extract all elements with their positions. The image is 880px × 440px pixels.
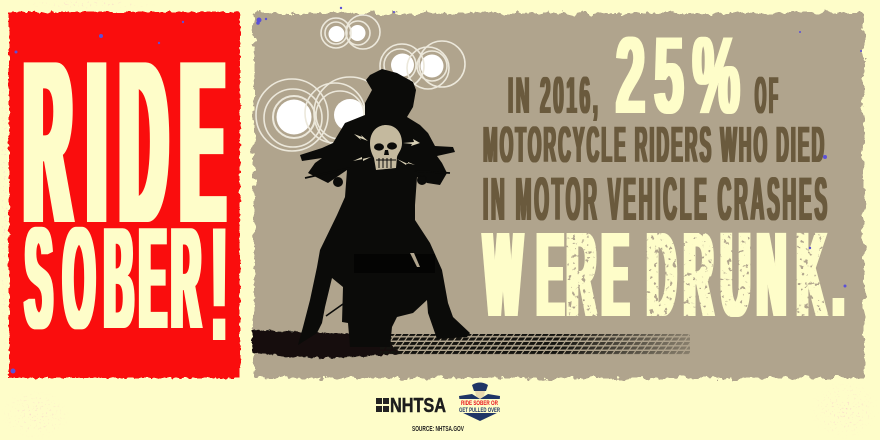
- panel: tan photo background: [254, 13, 864, 378]
- badge text line 2: GET PULLED OVER: [459, 407, 500, 414]
- shield: [459, 394, 500, 421]
- badge banner: [459, 399, 500, 413]
- logo: NHTSA: [376, 395, 446, 417]
- mid headlight pair: [380, 41, 465, 89]
- text: in 2016: IN 2016,: [508, 68, 598, 125]
- lightning bolts: [353, 134, 420, 165]
- text: motorcycle riders who died: MOTORCYCLE RIDERS WHO DIED: [483, 118, 824, 174]
- dark track section: [252, 330, 400, 358]
- text: in motor vehicle crashes: IN MOTOR VEHICLE CRASHES: [483, 165, 827, 234]
- NHTSA emblem grid: [376, 398, 389, 412]
- seat shadow detail: [354, 254, 435, 273]
- lattice track section: [380, 334, 690, 355]
- title line: SOBER!: SOBER: [25, 197, 201, 359]
- title line: RIDE: RIDE: [24, 14, 224, 272]
- text: 25%: 25%: [616, 15, 740, 137]
- skull teeth: [376, 158, 396, 168]
- skull nose: [384, 150, 389, 155]
- skull emblem: [353, 125, 420, 170]
- badge text line 1: RIDE SOBER OR: [461, 400, 498, 407]
- handlebar levers and controls: [305, 168, 450, 316]
- text: were drunk: WERE DRUNK.: [484, 207, 844, 343]
- tyre tracks on ground: [252, 330, 690, 358]
- NHTSA wordmark: NHTSA: [390, 395, 446, 417]
- small headlight pair: [321, 15, 380, 49]
- panel: red title background: [9, 12, 240, 378]
- skull eyes: [374, 143, 384, 151]
- source line: SOURCE: NHTSA.GOV: [412, 426, 464, 433]
- statistic text block: [483, 15, 844, 343]
- officer face: [475, 391, 485, 399]
- title: ride sober: [24, 14, 227, 375]
- large headlight pair: [256, 77, 386, 151]
- headlight glow circles: [256, 15, 465, 151]
- officer cap: [472, 382, 488, 391]
- title line: SOBER!: !: [212, 194, 227, 375]
- tan gap under seat: [410, 253, 420, 267]
- logo: ride sober or get pulled over badge: [459, 382, 500, 421]
- rider and bike body: [298, 69, 470, 347]
- text: of: OF: [755, 67, 778, 125]
- skull head: [370, 125, 402, 170]
- motorcycle rider silhouette: [298, 69, 470, 347]
